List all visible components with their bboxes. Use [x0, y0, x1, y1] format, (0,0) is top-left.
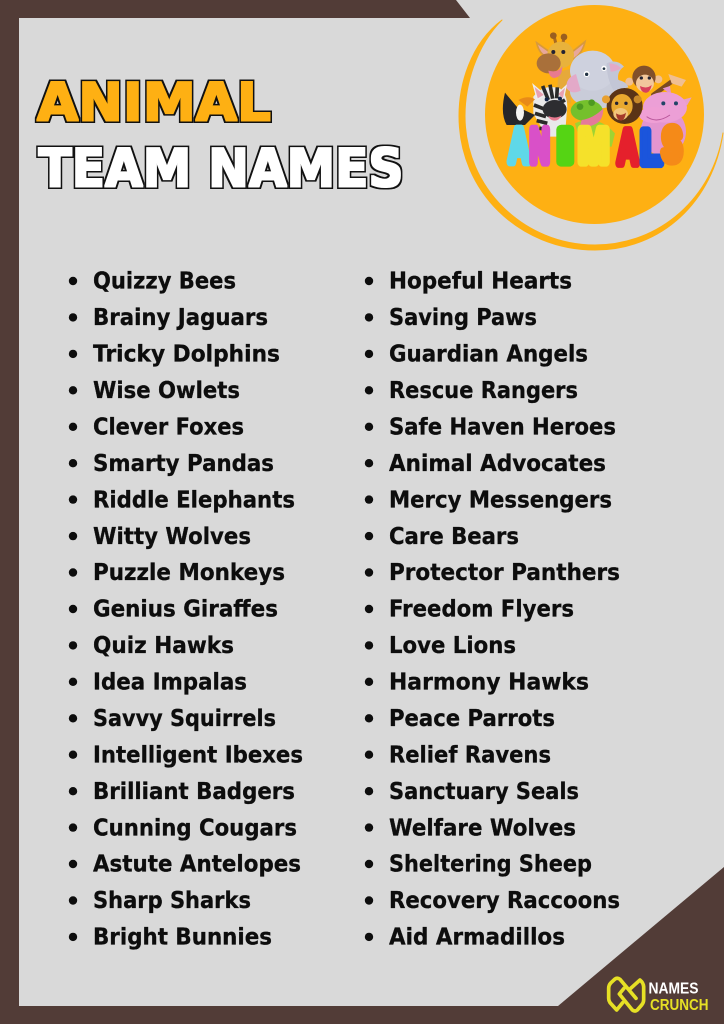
list: right column: Safe Haven Heroes [389, 414, 616, 440]
icon: cartoon animals group [503, 32, 692, 175]
icon: balloon letters ANIMALS: I [558, 120, 573, 173]
list: right column: Animal Advocates [389, 451, 606, 477]
list: left column: Quiz Hawks [93, 633, 234, 659]
list: left column: Riddle Elephants [93, 487, 295, 513]
list: right column: Freedom Flyers [389, 597, 574, 623]
icon: zebra [533, 85, 567, 137]
list: right column: Guardian Angels [389, 342, 588, 368]
list: right column: Welfare Wolves [389, 815, 576, 841]
list: left column: Sharp Sharks [93, 888, 251, 914]
decorative orange ring around logo [459, 20, 723, 250]
brand logo: Names Crunch [609, 978, 708, 1014]
list: right column: Harmony Hawks [389, 669, 589, 695]
title [37, 72, 404, 200]
list: left column: Savvy Squirrels [93, 706, 276, 732]
list: left column: Genius Giraffes [93, 597, 278, 623]
list: left column: Smarty Pandas [93, 451, 274, 477]
list: right column: Sheltering Sheep [389, 852, 592, 878]
list: left column: Intelligent Ibexes [93, 742, 303, 768]
title line: Team Names: TEAM NAMES [38, 138, 404, 200]
list: left column: Tricky Dolphins [93, 342, 280, 368]
list: right column: Peace Parrots [389, 706, 555, 732]
wordmark: NAMES: NAMES [648, 980, 699, 998]
list: right column: Protector Panthers [389, 560, 620, 586]
icon: balloon letters ANIMALS [509, 119, 682, 175]
icon: balloon letters ANIMALS: M [579, 120, 609, 173]
list: left column: Idea Impalas [93, 669, 247, 695]
icon: balloon letters ANIMALS: A [617, 122, 638, 175]
wordmark: CRUNCH: CRUNCH [650, 997, 708, 1014]
list: left column: Witty Wolves [93, 524, 251, 550]
list: right column: Hopeful Hearts [389, 269, 572, 295]
list: left column: Cunning Cougars [93, 815, 297, 841]
icon: balloon letters ANIMALS: S [662, 119, 682, 172]
list: right column: Aid Armadillos [389, 925, 565, 951]
brown frame: top and left bars [0, 0, 470, 1006]
list: right column [365, 269, 620, 951]
list: right column: Care Bears [389, 524, 519, 550]
list: left column: Brilliant Badgers [93, 779, 295, 805]
list: right column: Relief Ravens [389, 742, 551, 768]
list: right column: Saving Paws [389, 305, 537, 331]
list: right column: Sanctuary Seals [389, 779, 579, 805]
icon: balloon letters ANIMALS: N [530, 120, 549, 173]
list: left column: Wise Owlets [93, 378, 240, 404]
list: left column: Brainy Jaguars [93, 305, 268, 331]
icon: balloon letters ANIMALS: L [641, 122, 662, 175]
icon: giraffe [537, 32, 585, 103]
list: right column: Love Lions [389, 633, 516, 659]
list: left column: Quizzy Bees [93, 269, 236, 295]
list: right column: Rescue Rangers [389, 378, 578, 404]
title line: Animal: ANIMAL [37, 72, 271, 134]
icon: balloon letters ANIMALS: A [509, 120, 529, 173]
brown frame: bottom bar and corner triangle [0, 867, 724, 1024]
icon: lion [602, 88, 643, 124]
icon: toucan [503, 93, 535, 125]
icon: hippo [639, 86, 692, 156]
list: left column: Astute Antelopes [93, 852, 301, 878]
list: left column: Bright Bunnies [93, 925, 272, 951]
icon: N mark [609, 978, 644, 1011]
list: right column: Recovery Raccoons [389, 888, 620, 914]
icon: crocodile [571, 99, 615, 147]
orange circle [485, 5, 704, 224]
list: left column: Clever Foxes [93, 414, 244, 440]
icon: elephant [566, 51, 628, 108]
list: right column: Mercy Messengers [389, 487, 612, 513]
list: left column [69, 269, 303, 951]
icon: monkey [625, 66, 686, 95]
list: left column: Puzzle Monkeys [93, 560, 285, 586]
